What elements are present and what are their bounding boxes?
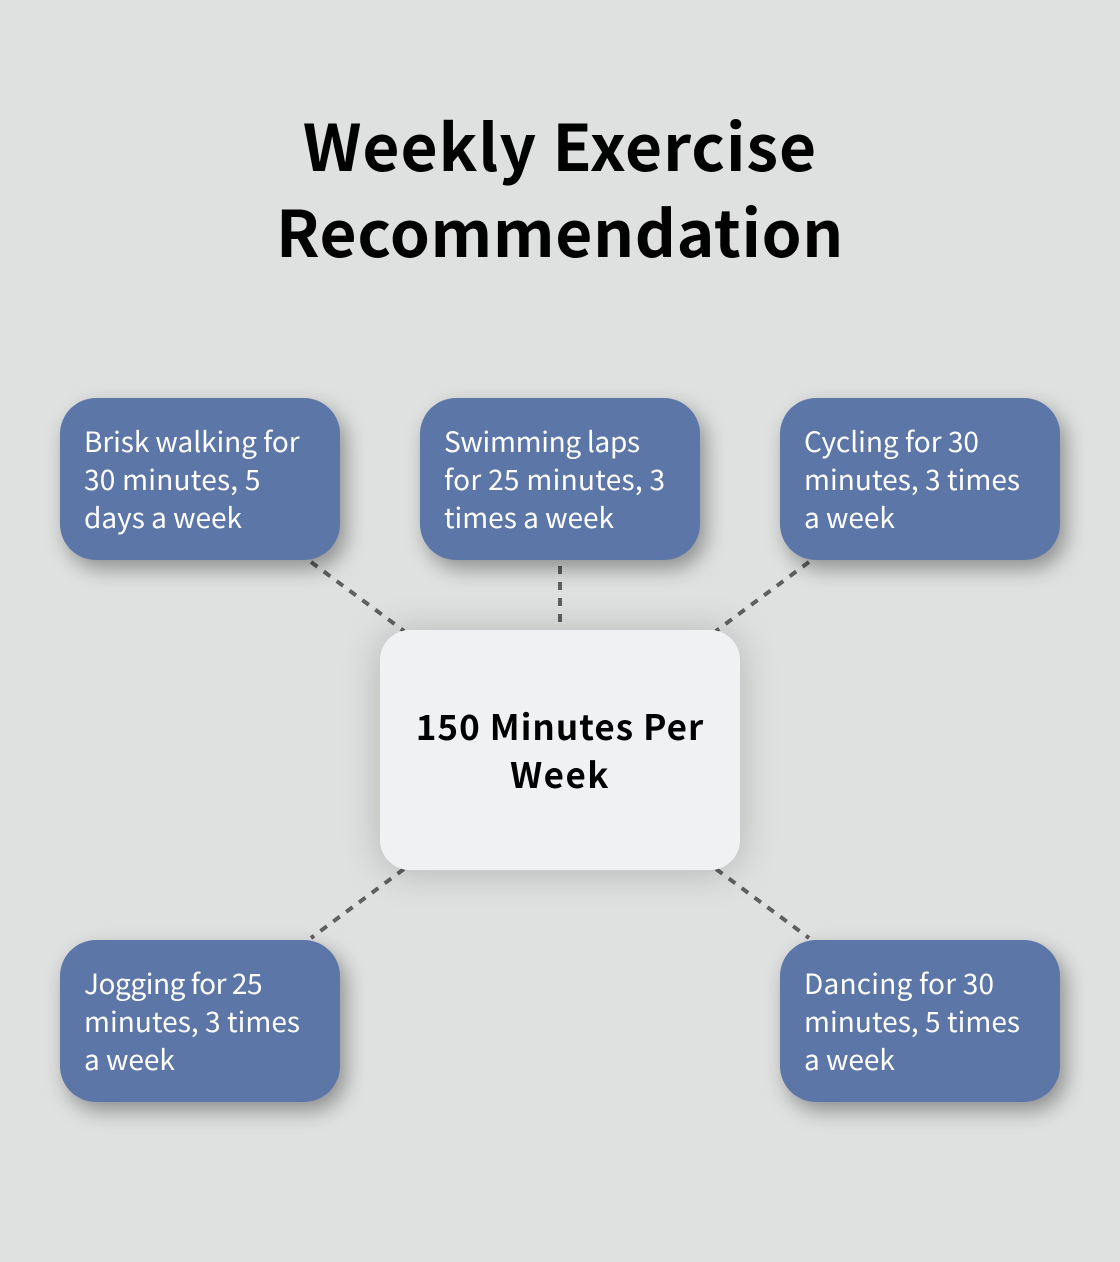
center box: 150 Minutes Per xyxy=(416,700,704,751)
card: jogging: Jogging for 25 xyxy=(84,963,262,1003)
card: jogging: a week xyxy=(84,1039,175,1079)
card: dancing: minutes, 5 times xyxy=(804,1001,1020,1041)
card: swimming xyxy=(420,398,700,560)
card: swimming: Swimming laps xyxy=(444,421,640,461)
card: dancing xyxy=(780,940,1060,1102)
card: cycling: minutes, 3 times xyxy=(804,459,1020,499)
card: dancing: Dancing for 30 xyxy=(804,963,994,1003)
center box: Week xyxy=(510,748,610,799)
card: swimming: for 25 minutes, 3 xyxy=(444,459,665,499)
card: cycling: Cycling for 30 xyxy=(804,421,979,461)
title: Recommendation xyxy=(276,184,844,276)
card: dancing: a week xyxy=(804,1039,895,1079)
card: cycling xyxy=(780,398,1060,560)
card: swimming: times a week xyxy=(444,497,614,537)
card: jogging: minutes, 3 times xyxy=(84,1001,300,1041)
card: jogging xyxy=(60,940,340,1102)
card: brisk walking: days a week xyxy=(84,497,242,537)
center box xyxy=(380,630,740,870)
card: brisk walking: Brisk walking for xyxy=(84,421,300,461)
card: cycling: a week xyxy=(804,497,895,537)
title xyxy=(276,98,844,276)
title: Weekly Exercise xyxy=(303,98,817,190)
card: brisk walking: 30 minutes, 5 xyxy=(84,459,261,499)
card: brisk walking xyxy=(60,398,340,560)
